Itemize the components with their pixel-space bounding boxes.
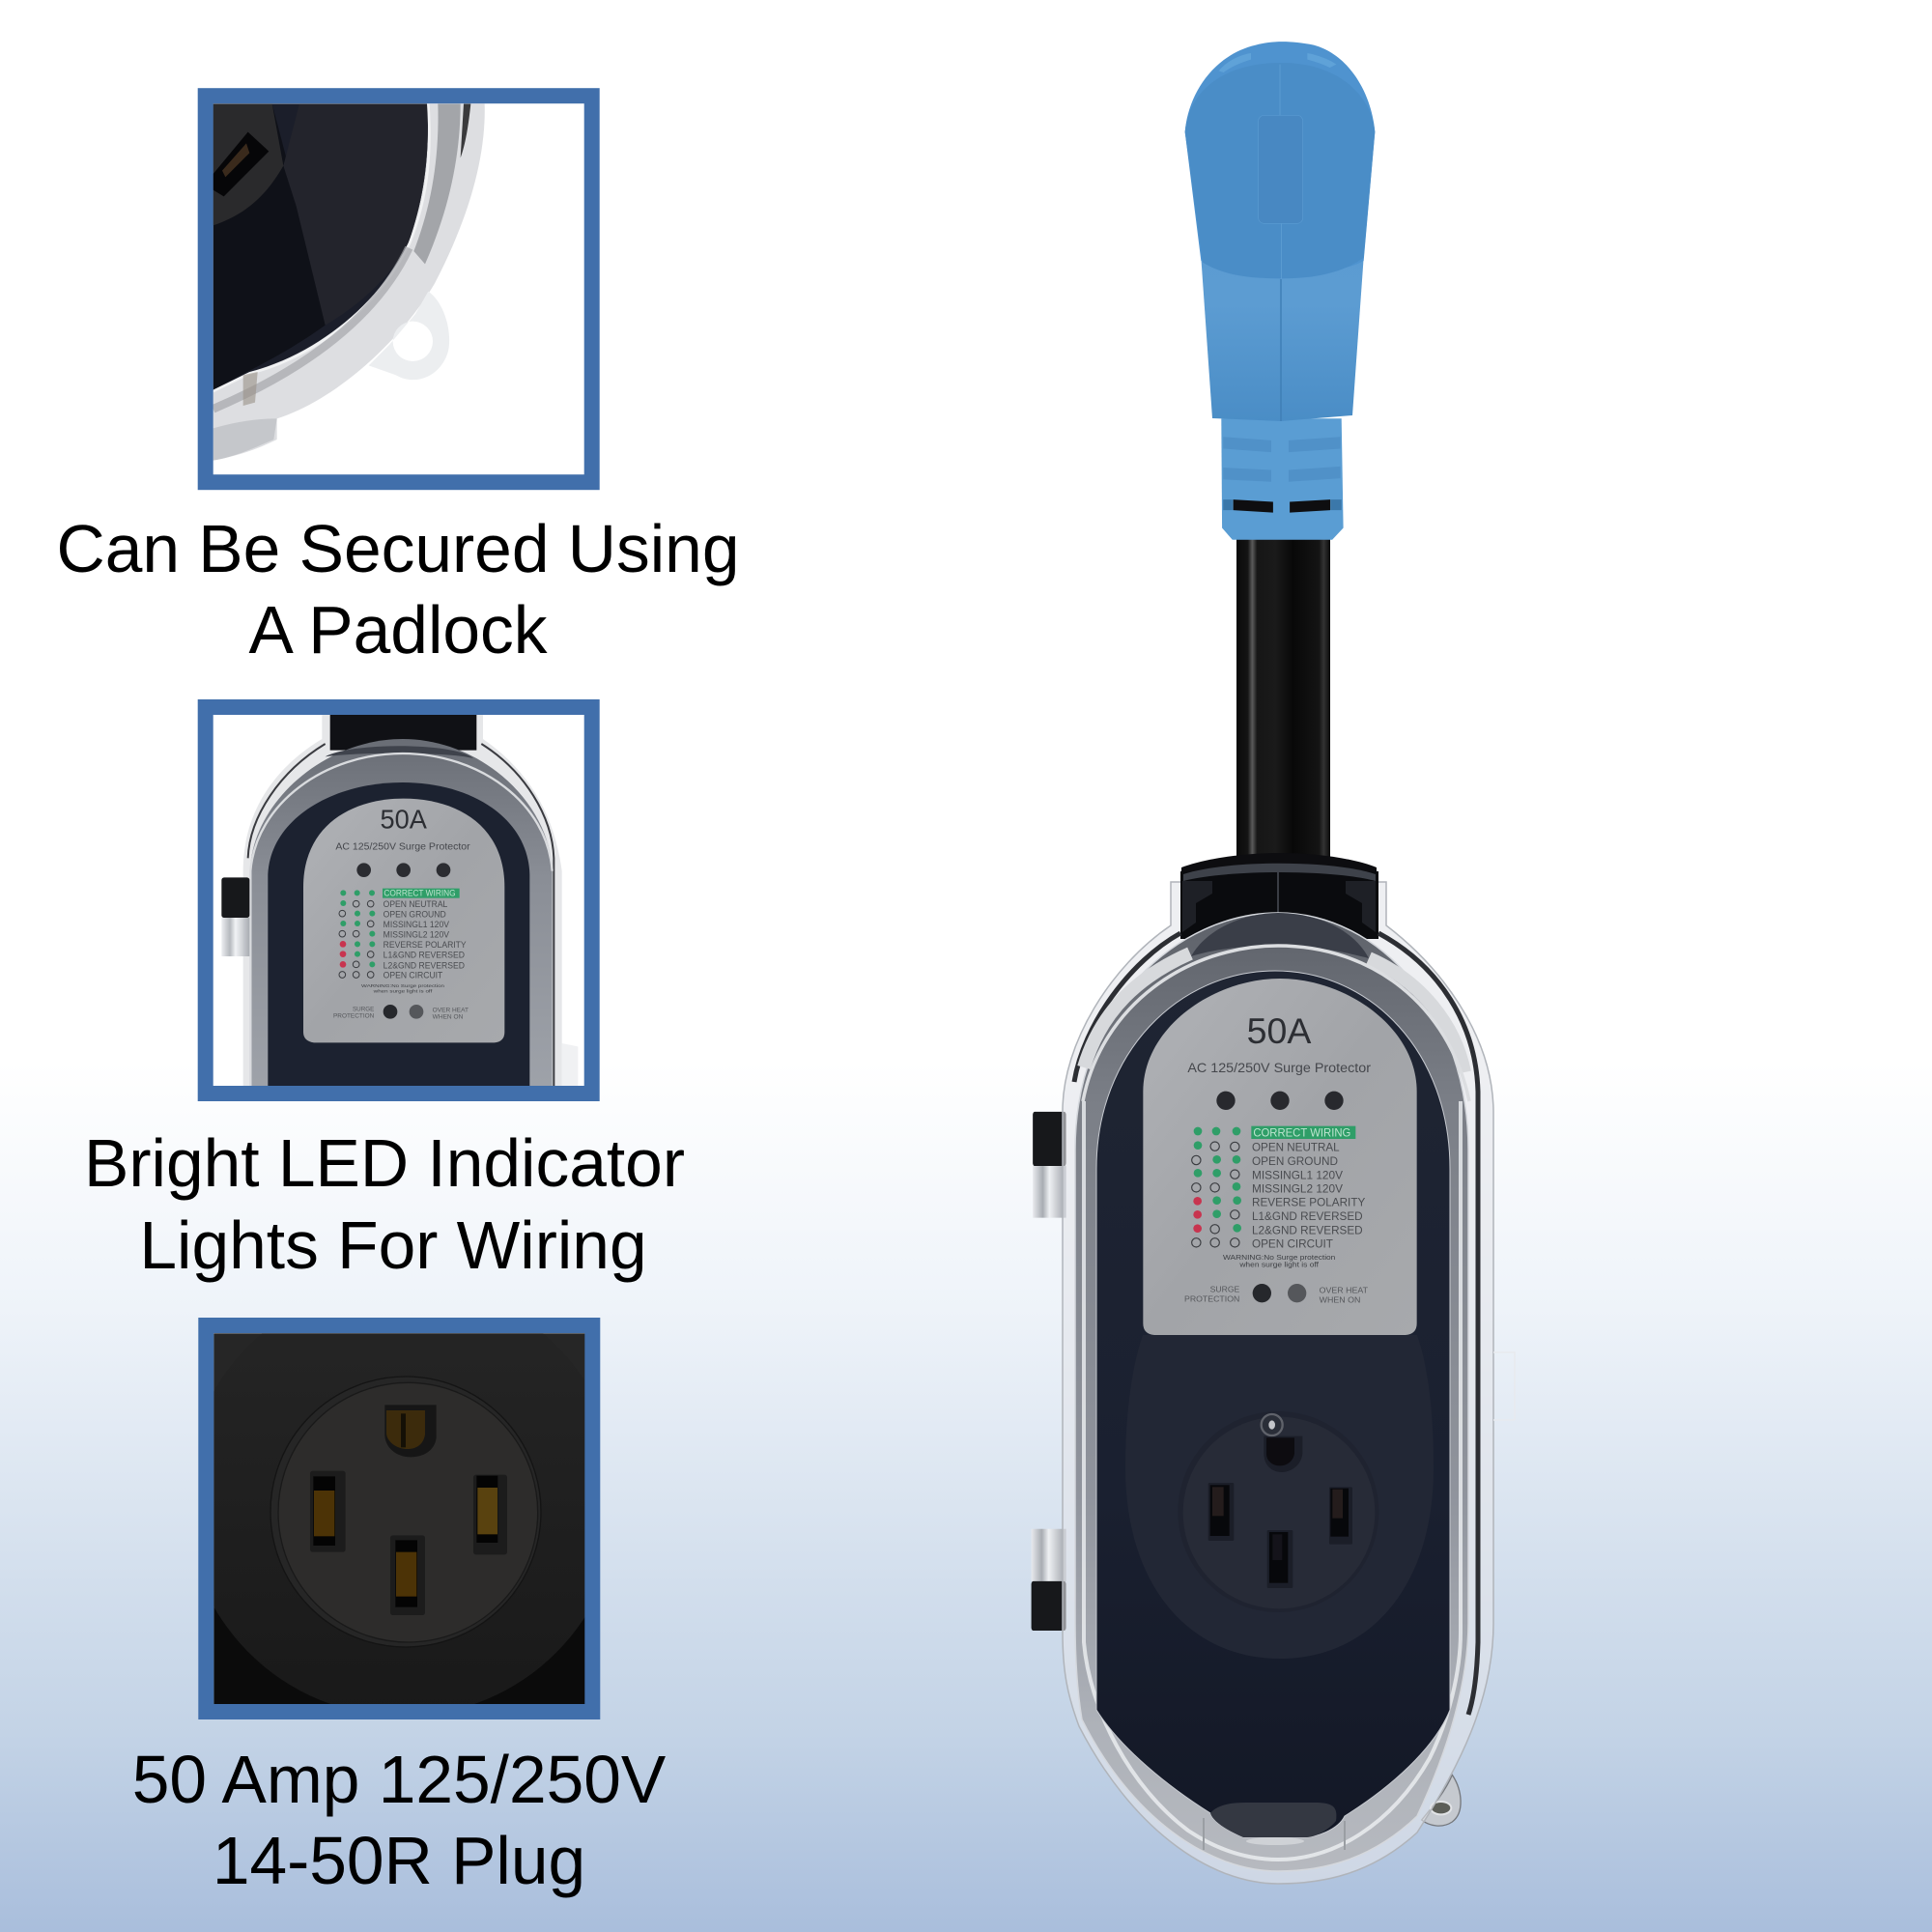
product: surge protector [1032,42,1515,1884]
label plate: OPEN CIRCUIT [384,971,443,980]
lens [1075,913,1468,1871]
wiring status table: L1&GND REVERSED [1252,1209,1363,1223]
right slot [473,1475,507,1554]
panel: LED indicator detail [213,715,584,1086]
lens dome [1191,913,1369,958]
label plate: L2&GND REVERSED [384,960,465,970]
blue plug [1185,42,1375,540]
wiring status table: L2&GND REVERSED [1252,1223,1363,1236]
cable [1236,534,1330,863]
label plate: OVER HEAT [433,1007,469,1013]
warning note: when surge light is off [1238,1263,1319,1269]
caption: padlock: Can Be Secured Using [57,511,739,586]
surge and over heat indicators: SURGE [1210,1285,1240,1294]
padlock loop [1422,1775,1461,1826]
warning note: WARNING:No Surge protection [1223,1255,1335,1262]
dark housing [1096,971,1450,1837]
wiring status table [1192,1125,1365,1251]
caption: LED indicator: Lights For Wiring [139,1208,647,1283]
surge and over heat indicators [1184,1284,1369,1304]
left slot [1208,1483,1234,1541]
plug head [1185,42,1375,278]
wiring status table: CORRECT WIRING [1253,1125,1350,1139]
label plate [1143,979,1417,1335]
clear case shell [1063,882,1493,1884]
plate title: 50A [1247,1010,1311,1051]
upper latch [1033,1112,1066,1218]
label plate: 50A [380,805,427,835]
wiring status table: MISSINGL1 120V [1252,1168,1343,1181]
right slot [1329,1487,1352,1545]
label plate: SURGE [353,1007,374,1013]
plug lower body [1201,253,1364,421]
panel: 14-50R plug detail [213,1333,585,1704]
left slot [310,1471,346,1552]
caption: plug: 14-50R Plug [213,1823,585,1898]
surge and over heat indicators: PROTECTION [1184,1293,1239,1303]
caption: padlock [57,511,739,668]
lower latch [1032,1529,1066,1631]
label plate: MISSINGL2 120V [384,930,449,940]
lens shoulder highlights [1084,953,1464,1072]
wiring status table: MISSINGL2 120V [1252,1182,1343,1196]
ground slot [384,1405,437,1457]
three main LEDs [1216,1092,1344,1110]
panel frame: 14-50R plug [206,1325,592,1712]
right side tab [1493,1352,1515,1420]
label plate: WHEN ON [433,1013,464,1020]
icon: padlock tab [369,292,449,380]
wiring status table: REVERSE POLARITY [1252,1196,1365,1209]
label plate: PROTECTION [333,1013,375,1020]
label plate [303,799,504,1042]
label plate: AC 125/250V Surge Protector [335,841,470,852]
plate subtitle: AC 125/250V Surge Protector [1187,1061,1371,1075]
socket dish [1125,1335,1434,1659]
latch [221,877,249,956]
label plate: WARNING:No Surge protection [361,983,444,989]
bottom slot [1267,1530,1293,1588]
caption: LED indicator [84,1125,685,1283]
surge and over heat indicators: OVER HEAT [1320,1285,1369,1294]
lower lens ribs [1204,1818,1345,1850]
lens rim [1083,946,1469,1101]
label plate: OPEN NEUTRAL [384,899,447,909]
caption: plug: 50 Amp 125/250V [132,1742,667,1817]
label plate: L1&GND REVERSED [384,951,465,960]
notch [1210,1803,1336,1837]
socket [1178,1411,1378,1612]
surge and over heat indicators: WHEN ON [1320,1294,1360,1304]
black neck [1180,853,1378,939]
label plate: CORRECT WIRING [384,889,456,898]
label plate: when surge light is off [374,988,433,994]
label plate: OPEN GROUND [384,910,446,920]
caption: LED indicator: Bright LED Indicator [84,1125,685,1201]
wiring status table: OPEN GROUND [1252,1154,1338,1168]
wiring status table: OPEN CIRCUIT [1252,1237,1334,1251]
caption: plug [132,1742,667,1898]
wiring status table: OPEN NEUTRAL [1252,1141,1340,1154]
panel frame: LED indicator [206,707,592,1094]
lens side highlights [1084,1101,1461,1860]
label plate: MISSINGL1 120V [384,920,449,929]
panel frame: padlock [206,96,592,482]
label plate: REVERSE POLARITY [384,940,467,950]
ground slot [1262,1414,1302,1472]
dark side lines [1074,933,1478,1715]
bottom slot [390,1535,425,1615]
caption: padlock: A Padlock [248,592,548,668]
warning note [1223,1255,1335,1269]
panel: padlock detail [213,103,485,460]
collar [1221,418,1344,540]
